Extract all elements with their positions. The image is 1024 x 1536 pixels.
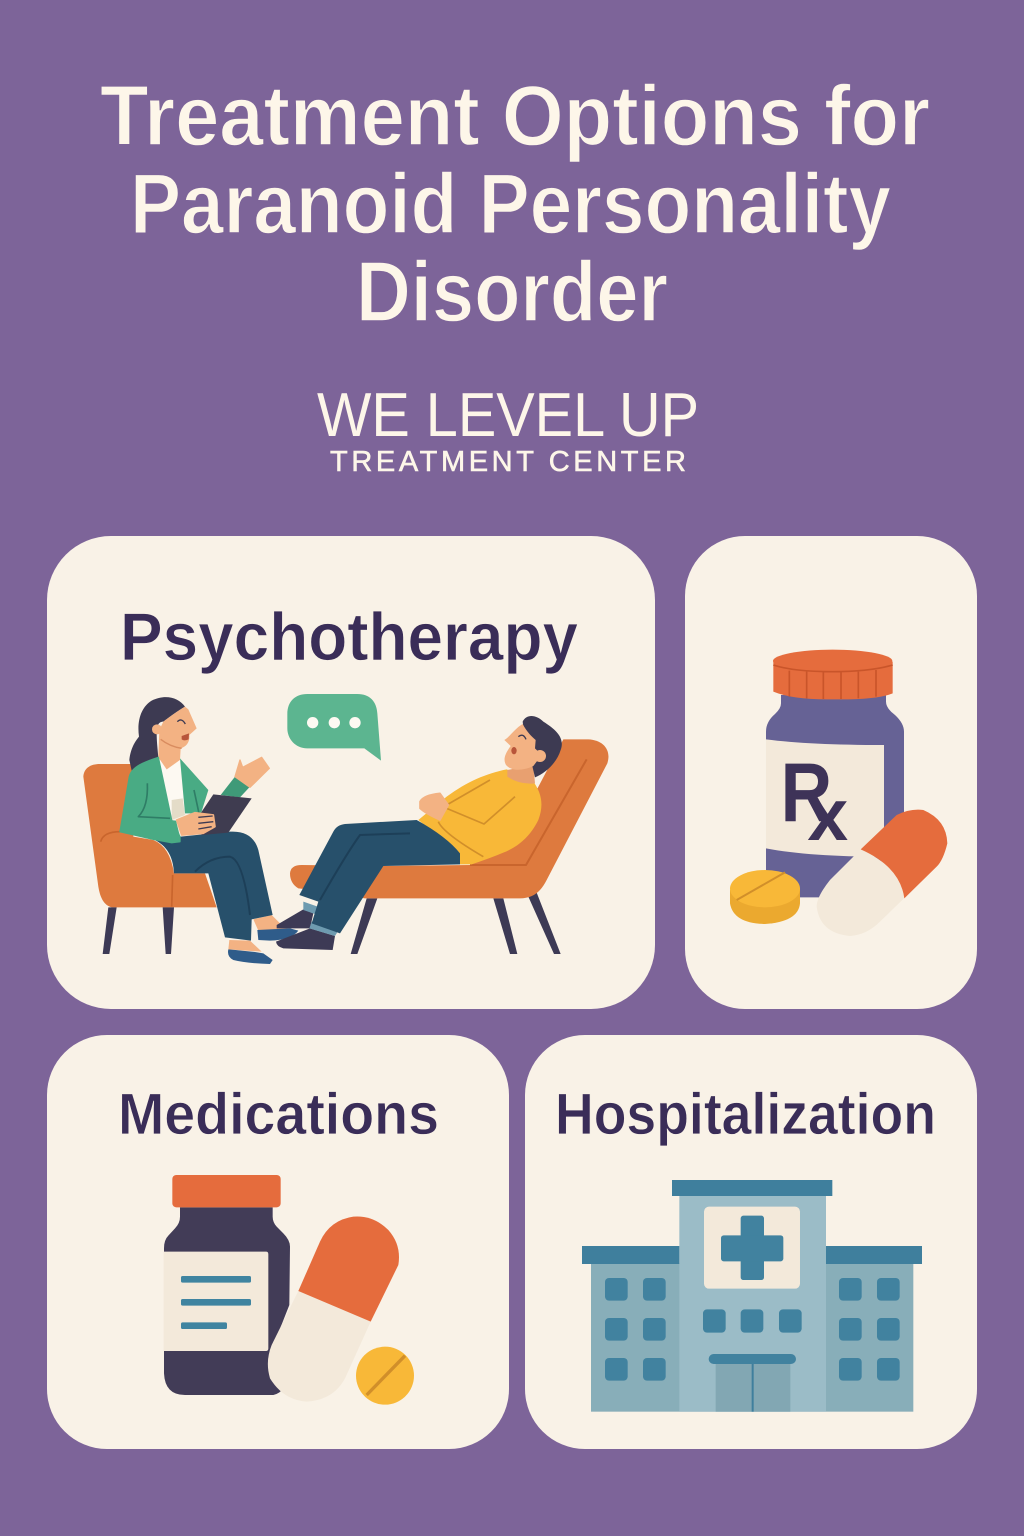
logo: We Level Up Treatment Center: WE LEVEL UP xyxy=(317,381,699,450)
title: Treatment Options for xyxy=(100,69,930,164)
icon: hospital building xyxy=(582,1180,922,1412)
icon: Rx bottle with pills xyxy=(730,650,947,936)
title xyxy=(100,69,930,340)
heading: hospitalization: Hospitalization xyxy=(555,1082,936,1147)
heading: medications: Medications xyxy=(118,1082,439,1147)
panel: psychotherapy xyxy=(47,536,655,1009)
panel: hospitalization xyxy=(525,1035,977,1449)
logo: We Level Up Treatment Center xyxy=(317,381,699,478)
illustration: therapist in armchair xyxy=(83,697,298,964)
icon: medicine bottle with capsule and tablet xyxy=(164,1175,414,1405)
heading: psychotherapy: Psychotherapy xyxy=(120,599,578,675)
icon: Rx bottle with pills: x xyxy=(807,774,848,856)
title: Paranoid Personality xyxy=(130,157,891,252)
title: Disorder xyxy=(356,245,668,340)
panel: medications xyxy=(47,1035,509,1449)
icon: Rx bottle with pills: R xyxy=(781,747,832,840)
logo: We Level Up Treatment Center: TREATMENT CENTER xyxy=(330,446,686,478)
panel: prescription xyxy=(685,536,977,1009)
icon: speech bubble xyxy=(287,694,381,761)
illustration: patient reclining on chaise xyxy=(276,716,608,954)
